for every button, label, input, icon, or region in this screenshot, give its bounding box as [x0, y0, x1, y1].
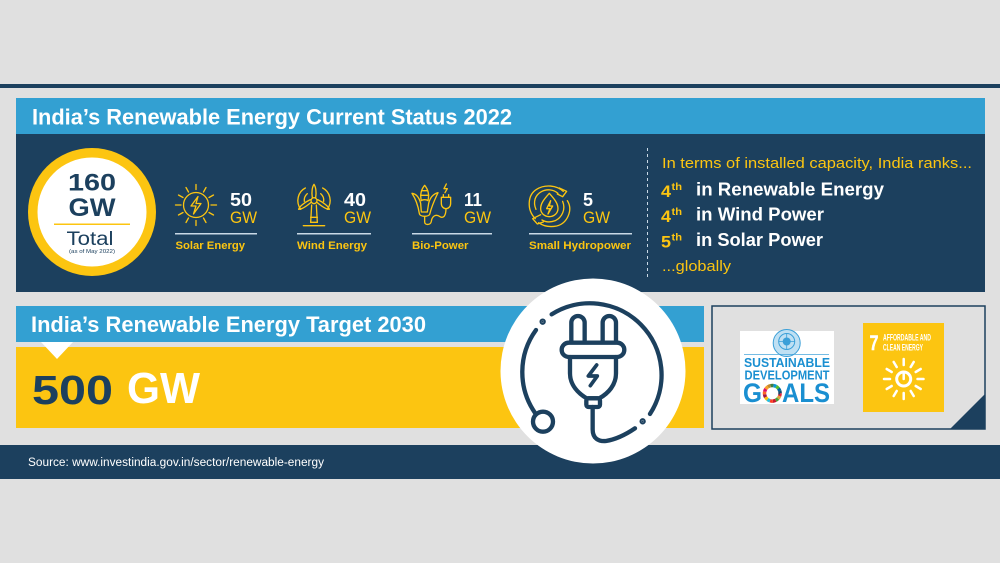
- logo: SDG 7 tile: AFFORDABLE AND: [883, 333, 931, 343]
- stat: wind energy: 40: [344, 190, 366, 210]
- stat: bio-power: [412, 184, 492, 252]
- stat: solar energy: GW: [230, 208, 257, 227]
- text block: global rankings: th: [672, 181, 682, 193]
- corner triangle: [950, 394, 985, 429]
- icon: plug in white circle: [500, 278, 686, 464]
- text block: global rankings: ...globally: [662, 258, 732, 275]
- stat: wind energy: Wind Energy: [297, 240, 368, 252]
- UN emblem: [773, 330, 800, 356]
- big number: 500 GW: GW: [127, 364, 200, 413]
- logo: sustainable development goals: DEVELOPMENT: [744, 368, 830, 382]
- text block: global rankings: th: [672, 232, 682, 244]
- icon: corn and plug: [412, 184, 451, 224]
- text block: global rankings: in Renewable Energy: [696, 180, 884, 200]
- stat: small hydropower: [529, 186, 632, 252]
- logo: SDG 7 tile: CLEAN ENERGY: [883, 342, 923, 352]
- footer bar: Source: www.investindia.gov.in/sector/renewable-energy: [28, 457, 324, 469]
- big number: 500 GW: [32, 364, 200, 413]
- pointer chevron: [41, 342, 73, 359]
- heading: current status: India’s Renewable Energy Current Status 2022: [32, 104, 512, 130]
- stat: wind energy: [297, 184, 371, 252]
- text block: global rankings: in Wind Power: [696, 204, 824, 224]
- icon: solar: [176, 184, 216, 226]
- logo: sustainable development goals: [740, 330, 834, 408]
- logo: SDG 7 tile: [863, 323, 944, 412]
- text block: global rankings: In terms of installed capacity, India ranks...: [662, 155, 972, 172]
- stat: small hydropower: Small Hydropower: [529, 240, 632, 252]
- icon: wind turbine: [298, 184, 330, 226]
- panel: target 2030: [16, 306, 704, 428]
- logo: sustainable development goals: ALS: [782, 378, 830, 408]
- text block: global rankings: [661, 155, 972, 275]
- stat: small hydropower: 5: [583, 190, 593, 210]
- stat: small hydropower: GW: [583, 208, 610, 227]
- SDG colour wheel: [764, 386, 780, 401]
- heading: current status: [16, 98, 985, 134]
- text block: global rankings: 4: [661, 182, 672, 201]
- stat: solar energy: 50: [230, 190, 252, 210]
- total capacity badge: (as of May 2022): [69, 249, 115, 255]
- text block: global rankings: 4: [661, 207, 672, 226]
- total capacity badge: [28, 148, 156, 276]
- stat: bio-power: 11: [464, 190, 482, 210]
- total capacity badge: GW: [68, 194, 116, 222]
- stat: bio-power: Bio-Power: [412, 240, 469, 252]
- stat: bio-power: GW: [464, 208, 491, 227]
- footer bar: [0, 445, 1000, 479]
- heading: target 2030: India’s Renewable Energy Target 2030: [31, 312, 426, 337]
- text block: global rankings: th: [672, 206, 682, 218]
- icon: sun with power symbol: [884, 359, 924, 399]
- panel: current status: [16, 98, 985, 292]
- big number: 500 GW: 500: [32, 367, 113, 413]
- panel: SDG logos: [712, 306, 985, 429]
- stat: solar energy: Solar Energy: [176, 240, 246, 252]
- total capacity badge: Total: [66, 229, 114, 250]
- icon: hydro cycle: [529, 186, 570, 227]
- logo: sustainable development goals: G: [743, 378, 762, 408]
- stat: solar energy: [175, 184, 257, 252]
- logo: SDG 7 tile: 7: [870, 332, 878, 355]
- logo: sustainable development goals: SUSTAINABLE: [744, 355, 830, 370]
- stat: wind energy: GW: [344, 208, 371, 227]
- text block: global rankings: 5: [661, 232, 671, 252]
- text block: global rankings: in Solar Power: [696, 230, 823, 250]
- total capacity badge: 160: [68, 170, 116, 196]
